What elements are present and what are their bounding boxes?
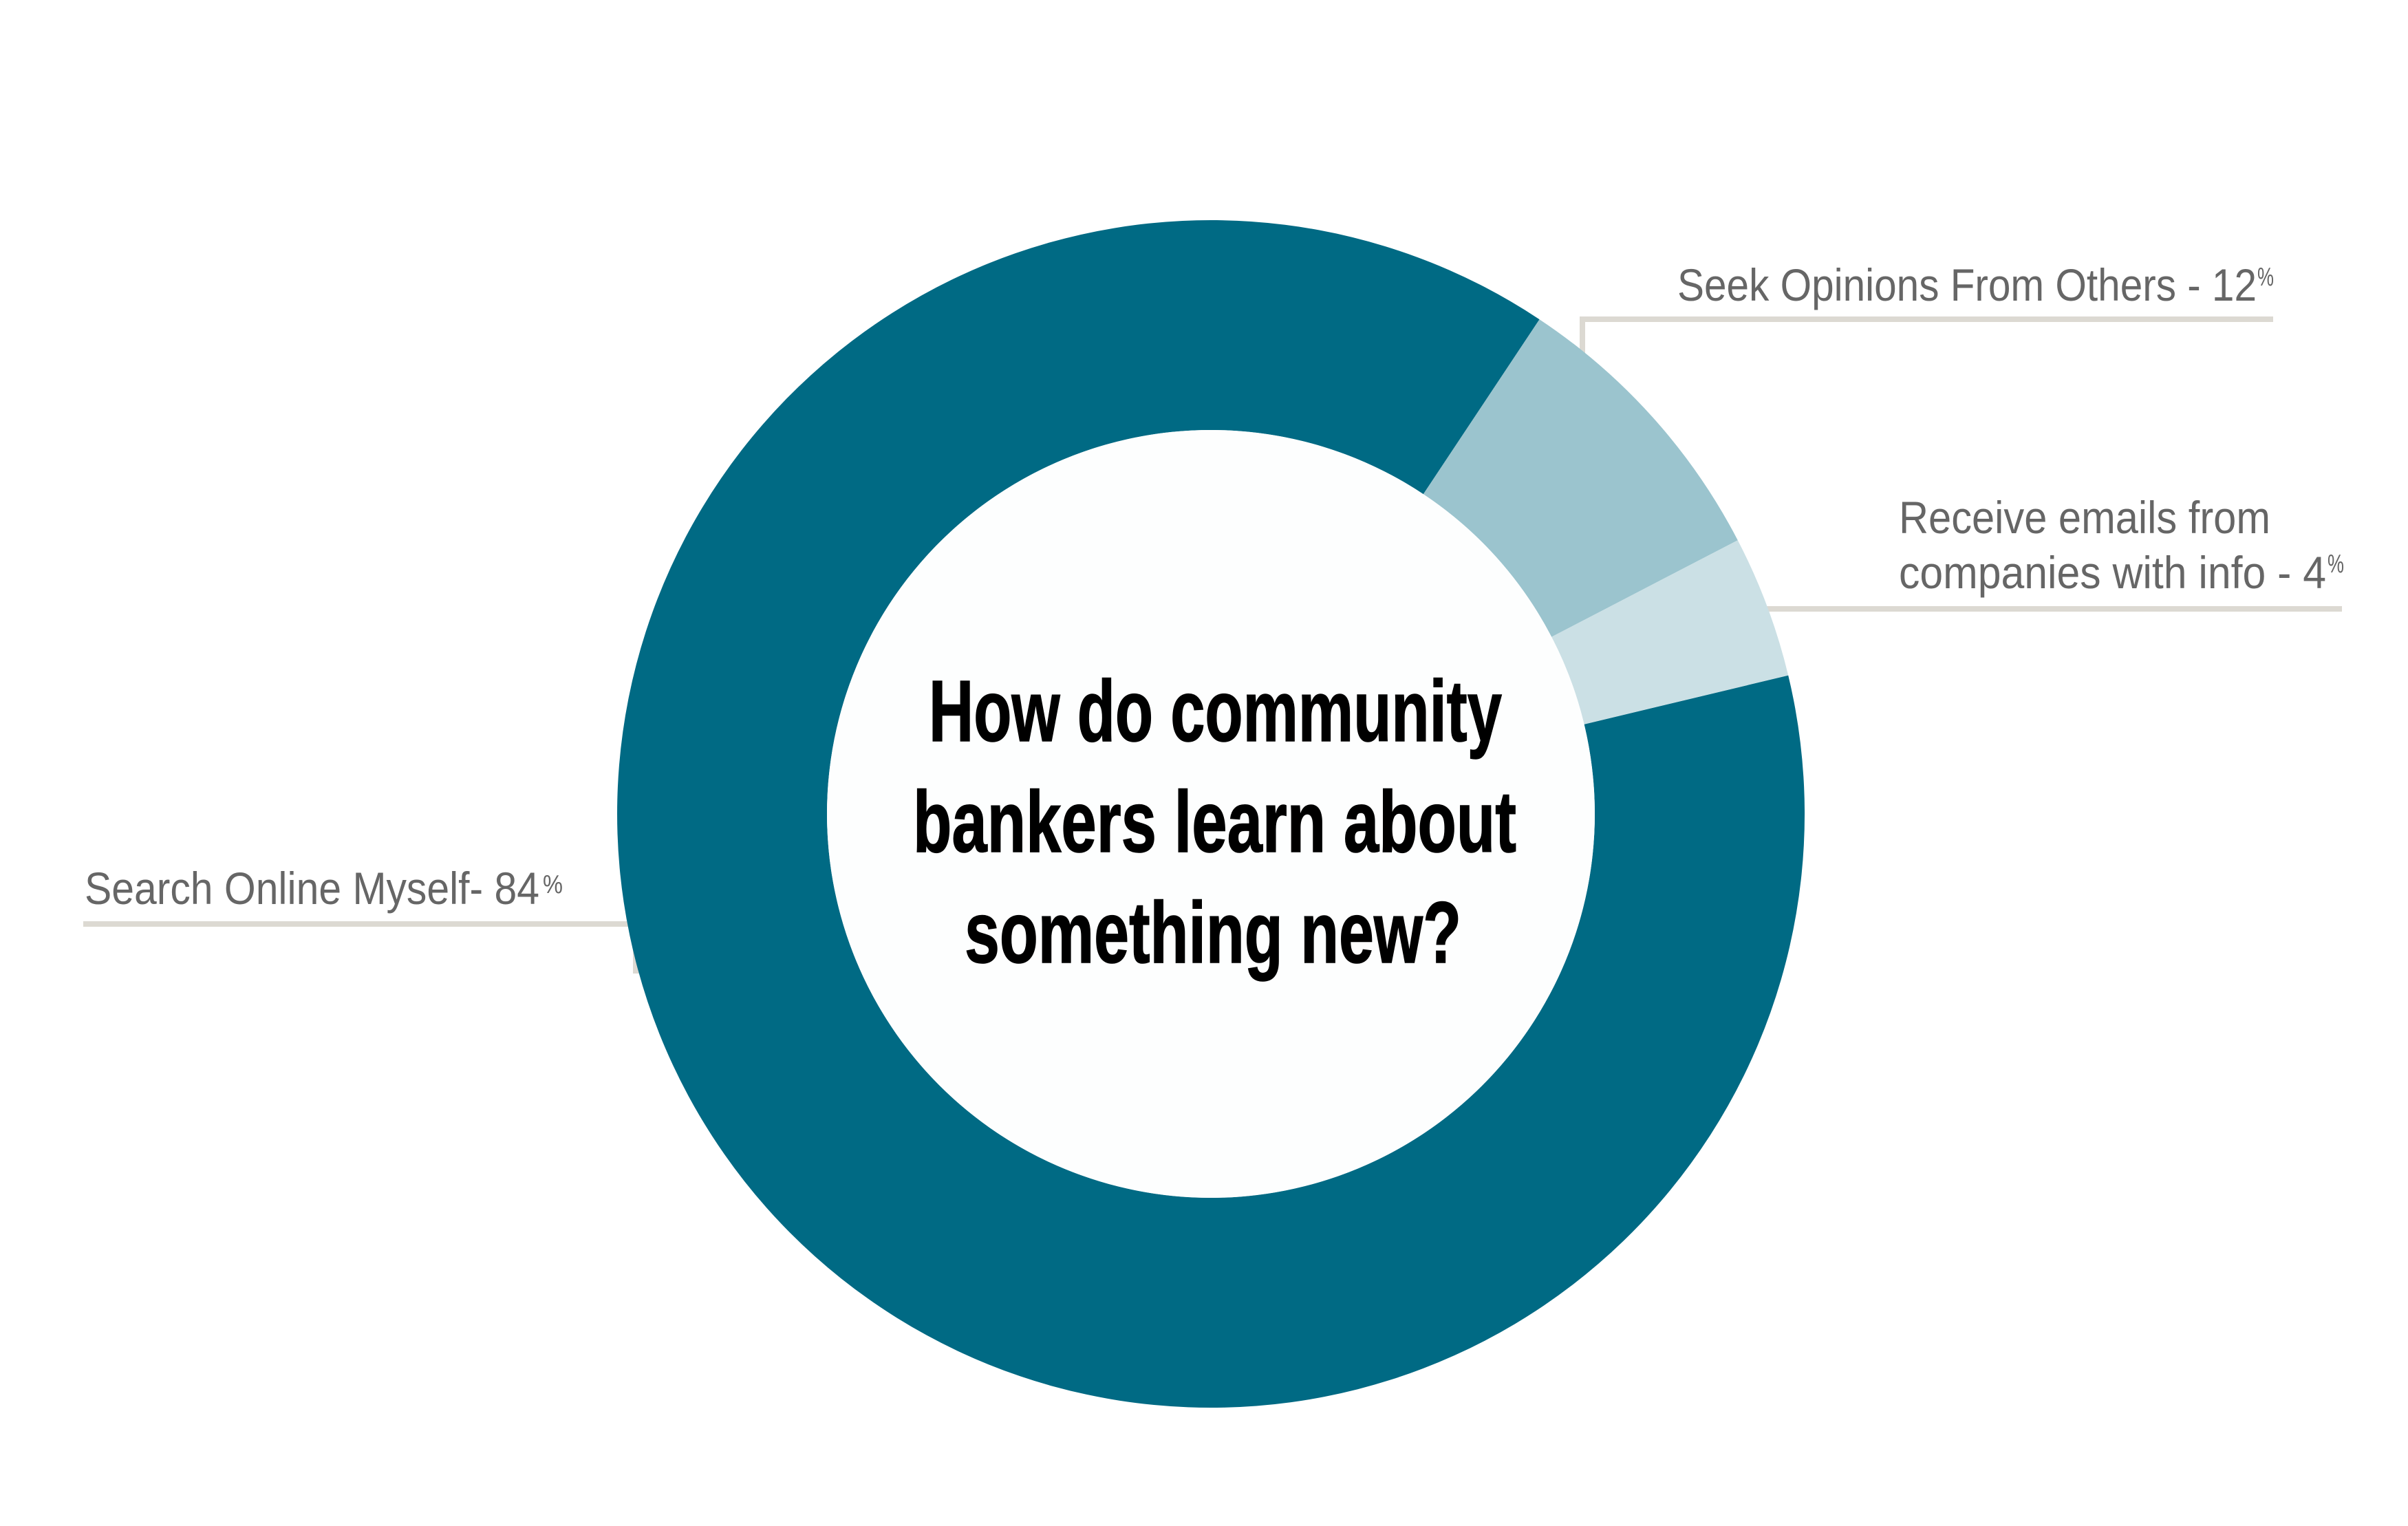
leader line: seek opinions <box>1580 316 2273 365</box>
title: bankers learn about <box>913 773 1516 870</box>
title <box>913 663 1516 981</box>
label: search online myself 84%: % <box>543 870 563 899</box>
label: receive emails from companies with info 4%: Receive emails from <box>1899 492 2270 543</box>
donut centre <box>827 430 1595 1198</box>
label: receive emails from companies with info 4%: % <box>2328 550 2344 579</box>
title: something new? <box>965 884 1461 981</box>
segment: seek opinions 12% <box>1423 319 1738 637</box>
leader line: receive emails <box>1754 606 2342 612</box>
label: seek opinions from others 12%: % <box>2257 263 2274 292</box>
label: search online myself 84%: Search Online Myself- 84 <box>85 863 539 914</box>
segment: search online 84% <box>617 220 1805 1408</box>
label: receive emails from companies with info 4% <box>1899 492 2344 598</box>
label: seek opinions from others 12%: Seek Opinions From Others - 12 <box>1677 259 2257 310</box>
donut chart <box>617 220 1805 1408</box>
segment: receive emails 4% <box>1551 540 1788 724</box>
leader line: search online <box>83 921 643 974</box>
label: receive emails from companies with info 4%: companies with info - 4 <box>1899 547 2326 598</box>
title: How do community <box>929 663 1502 760</box>
